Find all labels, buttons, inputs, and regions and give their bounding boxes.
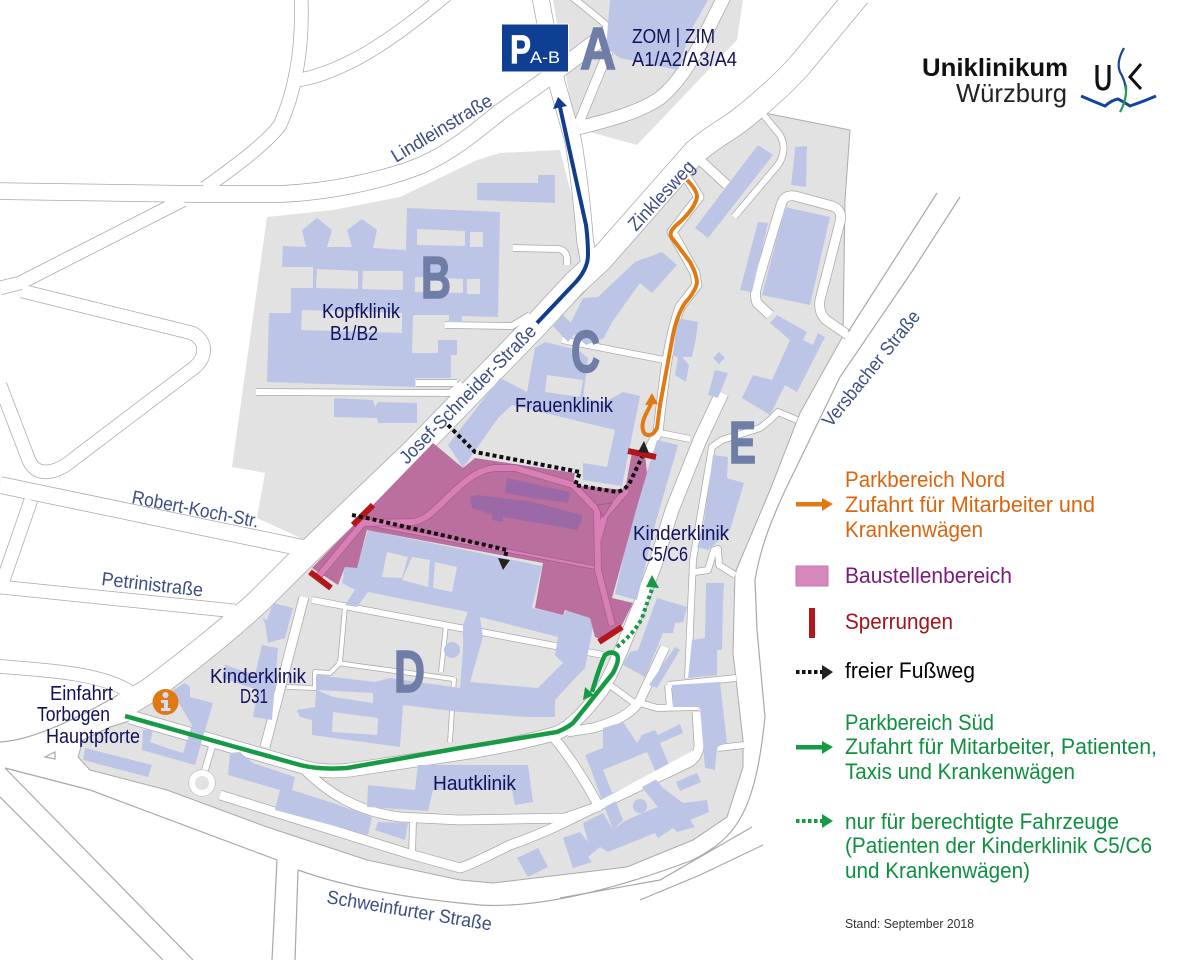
zone letter A: A: [580, 16, 616, 82]
building: narrow strip: [649, 647, 680, 688]
campus area A: [553, 0, 743, 145]
arrow: orange: [796, 498, 833, 511]
campus area B: [232, 150, 590, 540]
building: south complex lower: [563, 778, 709, 868]
label: Kopfklinik: Kopfklinik: [322, 301, 401, 323]
street label: Versbacher Strasse: Versbacher Straße: [819, 307, 925, 431]
building: north of Kopfklinik: [477, 175, 555, 203]
zone letter C: C: [571, 319, 600, 385]
building: D31 north: [262, 603, 293, 643]
building: strip west of large hall: [740, 222, 768, 292]
parking sign P A-B: [502, 24, 568, 72]
building: NE small: [791, 146, 807, 187]
building: E lower 2: [688, 583, 724, 678]
building: small block: [713, 352, 725, 364]
site island: [597, 503, 612, 517]
road network casing: [0, 0, 858, 868]
label: Kinderklinik C5/C6: C5/C6: [642, 544, 688, 566]
logo: Uniklinikum Wuerzburg: [922, 48, 1156, 112]
legend: Parkbereich Nord: Parkbereich Nord: [845, 467, 1005, 492]
building: small south block: [375, 822, 408, 840]
zone letter D: D: [394, 639, 425, 705]
legend: berechtigte Fahrzeuge: [796, 809, 1152, 883]
legend: freier Fussweg: freier Fußweg: [845, 658, 975, 683]
street label: Zinklesweg: Zinklesweg: [624, 157, 700, 235]
building: south of Kopfklinik: [334, 398, 417, 423]
building: E lower 3: [672, 682, 727, 770]
date note: Stand: September 2018: [845, 916, 974, 931]
legend: Parkbereich Nord: [796, 467, 1095, 542]
label: Kinderklinik C5/C6: [633, 523, 730, 566]
building: Kinderklinik C5/C6: [615, 440, 678, 600]
demolished building: [470, 478, 582, 530]
street label: Josef-Schneider-Strasse: Josef-Schneider-Straße: [396, 321, 541, 469]
icon: UKW mark: [1081, 48, 1156, 112]
closures: [310, 451, 656, 642]
building: east of orange route: [673, 318, 698, 382]
building: Hautklinik: [367, 765, 533, 811]
label: Kinderklinik D31: D31: [240, 686, 268, 708]
label: ZOM ZIM: ZOM | ZIM: [632, 26, 715, 48]
building: D main complex: [297, 530, 595, 747]
construction area: [312, 443, 647, 640]
legend: berechtigte Fahrzeuge: nur für berechtigte Fahrzeuge: [845, 809, 1119, 834]
route: orange Parkbereich Nord: [642, 180, 697, 435]
small roundabout: [188, 770, 216, 796]
legend: Parkbereich Nord: Zufahrt für Mitarbeiter und: [845, 492, 1095, 517]
label: Kinderklinik D31: [210, 666, 307, 708]
route: green dotted authorised vehicles: [617, 575, 659, 647]
zone letter B: B: [421, 245, 451, 311]
label: ZOM ZIM: A1/A2/A3/A4: [632, 49, 737, 71]
building: south block: [676, 773, 701, 791]
building: strip: [708, 370, 728, 398]
legend: berechtigte Fahrzeuge: und Krankenwägen): [845, 858, 1030, 883]
legend: Parkbereich Sued: Taxis und Krankenwägen: [845, 759, 1075, 784]
road crossing south complex: [600, 752, 699, 805]
label: Einfahrt Torbogen Hauptpforte: Einfahrt: [50, 683, 113, 705]
building: Hauptpforte block: [142, 683, 213, 765]
route: blue to parking A-B: [537, 97, 588, 323]
building: C wing: [568, 252, 677, 345]
zone letter E: E: [729, 410, 756, 476]
building: ZOM ZIM: [606, 0, 708, 70]
building: Frauenklinik: [448, 342, 640, 486]
footpath north: [448, 425, 649, 492]
outer street lines: [0, 193, 960, 960]
legend: Parkbereich Sued: Parkbereich Süd: [845, 710, 994, 735]
parking sign P A-B: P: [510, 28, 531, 72]
building: gate block: [83, 748, 152, 777]
street label: Lindleinstrasse: Lindleinstraße: [388, 91, 496, 167]
label: Kopfklinik: [322, 301, 401, 345]
map base: grey campus areas: [78, 0, 850, 883]
route: green Parkbereich Sued: [125, 652, 618, 769]
logo: Uniklinikum Wuerzburg: Würzburg: [956, 78, 1067, 108]
label: Frauenklinik: Frauenklinik: [515, 395, 614, 417]
legend: Parkbereich Sued: Zufahrt für Mitarbeiter, Patienten,: [845, 734, 1157, 759]
label: Kinderklinik C5/C6: Kinderklinik: [633, 523, 730, 545]
street label: Robert-Koch-Str.: Robert-Koch-Str.: [130, 487, 261, 533]
clinic buildings: [83, 0, 830, 877]
building: south complex north arm: [585, 722, 683, 830]
legend: berechtigte Fahrzeuge: (Patienten der Kinderklinik C5/C6: [845, 833, 1152, 858]
building: Kopfklinik: [267, 208, 500, 387]
footpath south: [352, 515, 510, 570]
main campus area: [78, 113, 850, 883]
parking sign P A-B: A-B: [530, 48, 560, 67]
street label: Petrinistrasse: Petrinistraße: [100, 569, 204, 602]
legend: Sperrungen: Sperrungen: [845, 609, 953, 634]
road network surface: [0, 0, 858, 868]
label: Kinderklinik D31: Kinderklinik: [210, 666, 307, 688]
logo: Uniklinikum Wuerzburg: Uniklinikum: [922, 54, 1068, 82]
building: west long block: [228, 752, 372, 835]
legend: Sperrungen: [809, 608, 953, 638]
label: ZOM ZIM: [632, 26, 737, 71]
building: large hall: [762, 207, 830, 305]
label: Hautklinik: Hautklinik: [433, 773, 517, 795]
legend: Parkbereich Nord: Krankenwägen: [845, 517, 983, 542]
building: south of C5/C6: [623, 598, 687, 677]
street label: Schweinfurter Strasse: Schweinfurter Straße: [325, 887, 493, 935]
building: NE wing: [695, 145, 773, 238]
building: E lower 1: [697, 455, 744, 550]
building: south square: [517, 848, 548, 877]
legend: Baustellenbereich: Baustellenbereich: [845, 563, 1012, 588]
label: Kopfklinik: B1/B2: [330, 323, 378, 345]
legend: Parkbereich Sued: [796, 710, 1157, 784]
building: E complex: [742, 315, 825, 415]
building: C annex: [552, 315, 578, 342]
label: Einfahrt Torbogen Hauptpforte: Torbogen: [37, 704, 110, 726]
label: Einfahrt Torbogen Hauptpforte: [37, 683, 140, 748]
label: Einfahrt Torbogen Hauptpforte: Hauptpforte: [46, 726, 140, 748]
pink site polygon: [312, 443, 647, 640]
building: D31: [222, 645, 278, 720]
site roads: [318, 468, 627, 625]
icon: info marker: [152, 689, 178, 715]
